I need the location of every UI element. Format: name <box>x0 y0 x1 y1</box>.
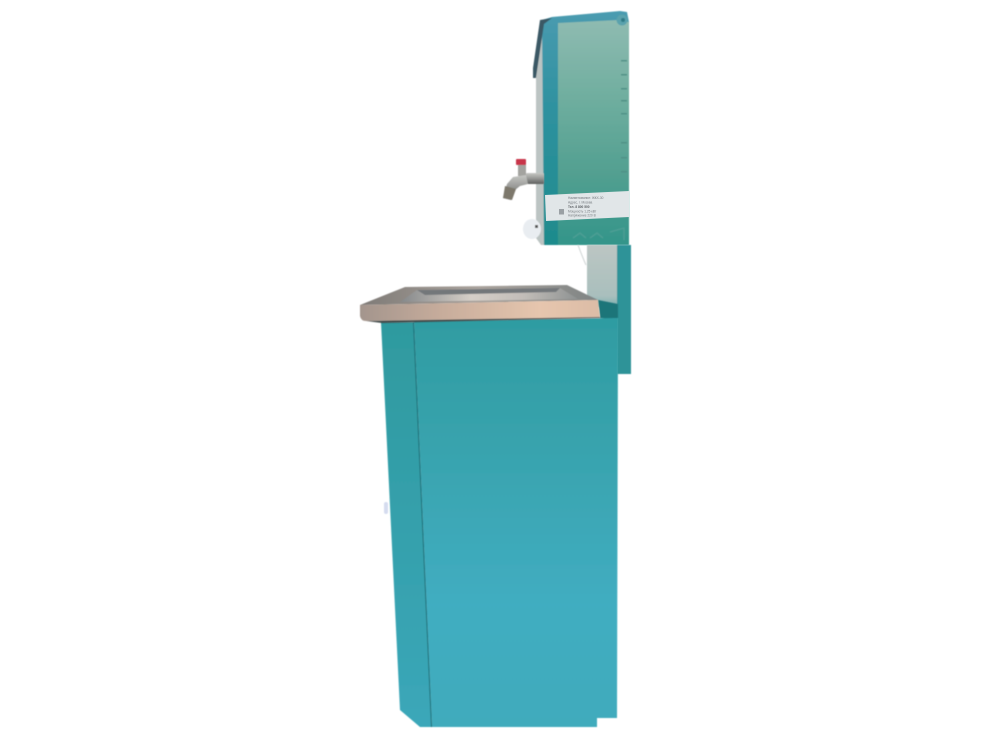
label text: Тел. 8 800 500 <box>568 205 590 209</box>
tank hinge <box>616 14 628 26</box>
faucet red handle <box>516 159 526 165</box>
faucet <box>503 159 544 200</box>
white float bulb <box>523 219 541 239</box>
label QR mark <box>559 209 564 214</box>
faucet body <box>503 175 528 200</box>
rear column <box>578 245 631 374</box>
tank rivets <box>621 60 627 172</box>
water tank <box>533 11 629 245</box>
door handle <box>384 502 388 514</box>
tank grey side strip <box>536 30 544 245</box>
tank teal side strip <box>542 11 629 245</box>
label text <box>568 196 604 218</box>
sink top surface <box>360 285 598 305</box>
label text: Наименование: ЖКХ-30 <box>568 196 604 200</box>
faucet valve stem <box>518 163 526 176</box>
cabinet side panel <box>381 322 432 727</box>
cabinet back shadow <box>598 300 618 320</box>
column teal strip <box>617 245 631 374</box>
product label <box>545 191 629 221</box>
label text: Мощность 1,25 кВт <box>568 210 597 214</box>
cabinet door panel <box>414 318 618 727</box>
tank lower seam <box>573 228 624 240</box>
drain hose <box>578 245 586 265</box>
label text: Адрес, г. Москва <box>568 200 593 204</box>
label text: Напряжение 220 В <box>568 214 596 218</box>
sink basin <box>400 288 578 302</box>
column grey panel <box>587 245 617 318</box>
cabinet <box>381 300 618 727</box>
sink <box>360 285 600 323</box>
sink front edge <box>360 300 600 321</box>
tank front face <box>558 20 629 245</box>
door edge line <box>414 322 432 727</box>
sink underside shadow <box>366 317 600 323</box>
faucet pipe <box>526 173 544 184</box>
tank lid flap <box>533 18 552 78</box>
basin back wall <box>417 288 560 295</box>
faucet threaded nozzle <box>503 186 516 200</box>
